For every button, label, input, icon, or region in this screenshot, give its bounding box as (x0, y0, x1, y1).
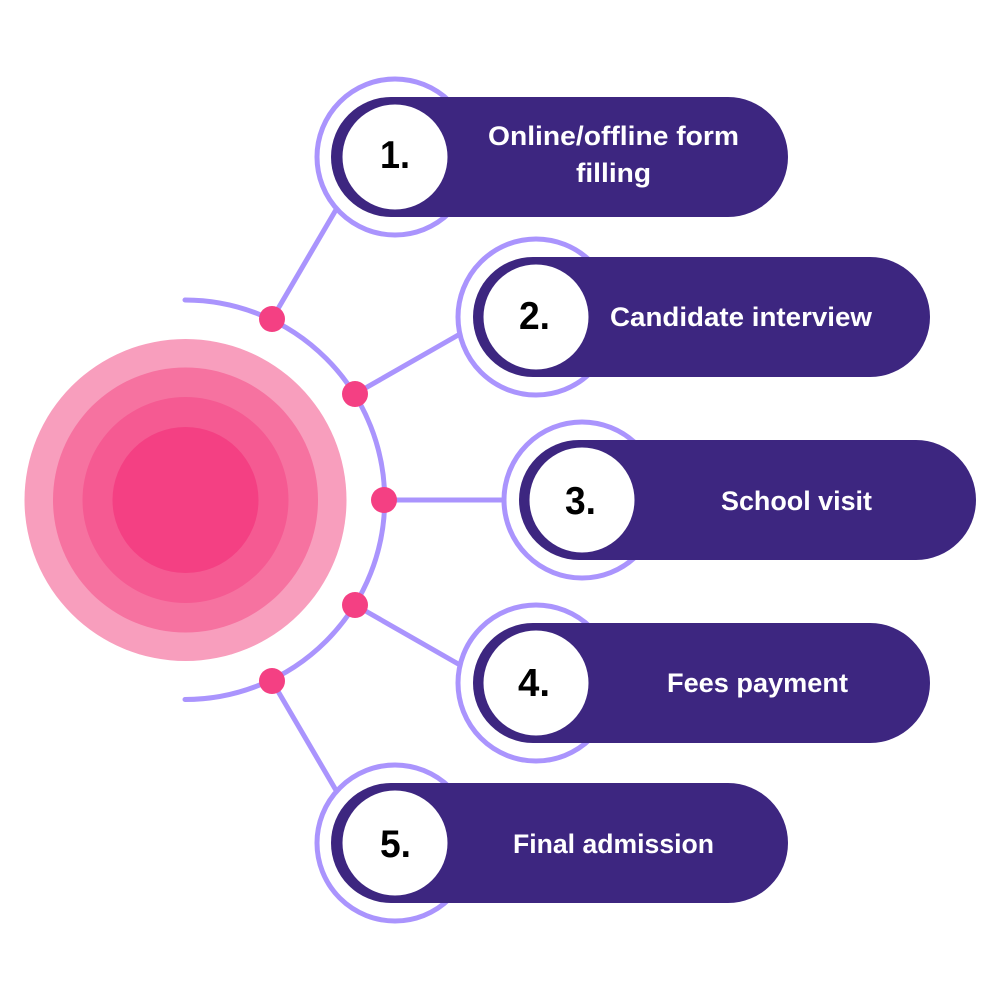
step 1 (317, 79, 788, 235)
connector arc (185, 300, 385, 700)
connector lines (272, 208, 505, 792)
connector dots (259, 306, 397, 694)
step 5: Final admission (513, 829, 714, 859)
step 3: 3. (565, 480, 596, 523)
step 4 (458, 605, 930, 761)
concentric pink circles (24, 339, 346, 661)
step 3 (504, 422, 976, 578)
step 1: 1. (380, 134, 410, 177)
step 2 (458, 239, 930, 395)
step 2: Candidate interview (610, 302, 873, 332)
step 5: 5. (380, 823, 411, 866)
step 3: School visit (721, 486, 872, 516)
step 1: filling (576, 158, 651, 188)
step 2: 2. (519, 295, 550, 338)
step 4: Fees payment (667, 668, 848, 698)
step 5 (317, 765, 788, 921)
step 4: 4. (518, 662, 550, 705)
step 1: Online/offline form (488, 121, 739, 151)
